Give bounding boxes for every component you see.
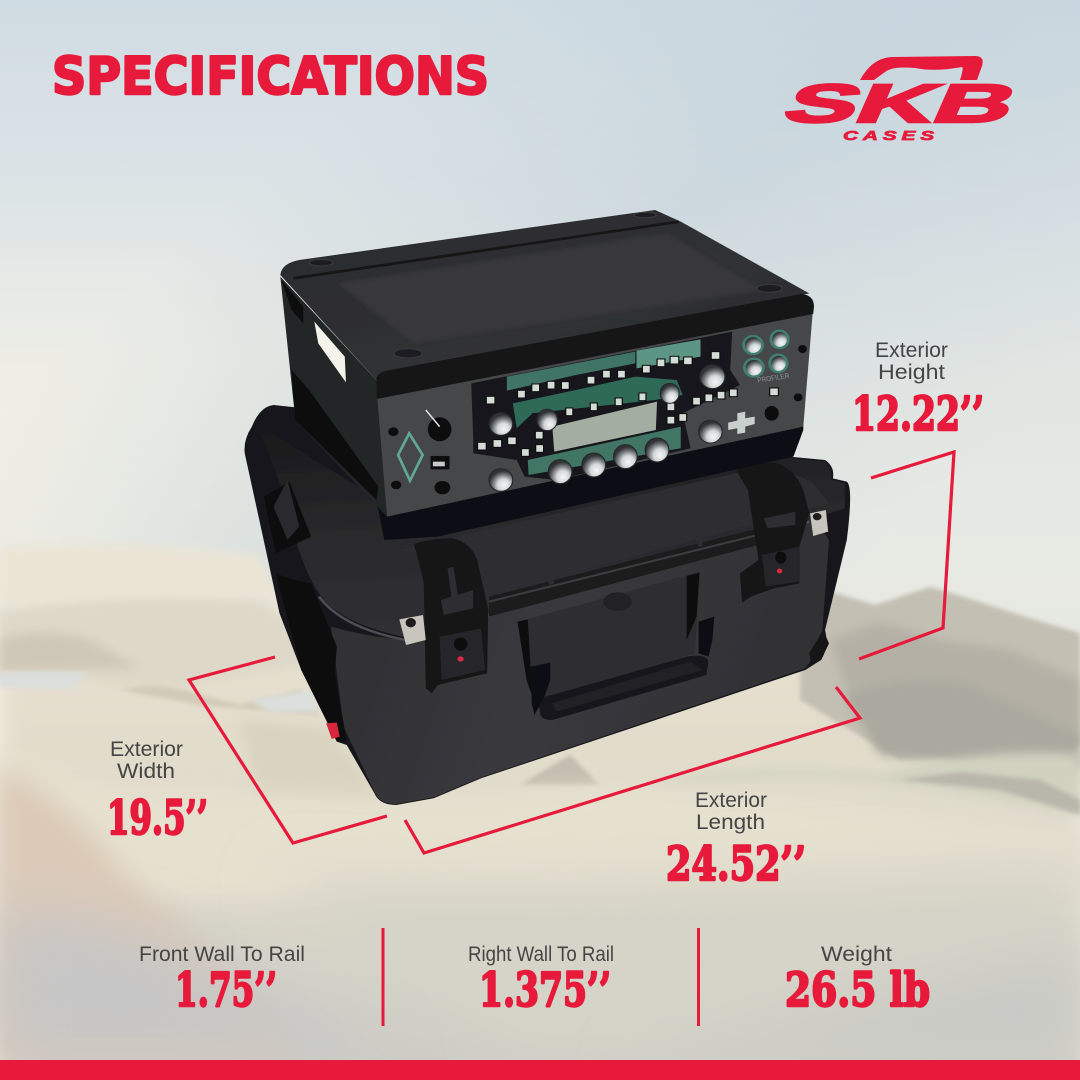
left hinge plate xyxy=(399,615,426,645)
label: exterior length: Exterior xyxy=(695,789,767,812)
label: right wall to rail: Right Wall To Rail xyxy=(468,943,614,966)
label: exterior height: Exterior xyxy=(875,339,948,362)
value: 26.5 lb: 26.5 lb xyxy=(785,963,930,1018)
title: SPECIFICATIONS xyxy=(52,47,489,107)
spec: right wall to rail xyxy=(468,943,614,1018)
label: weight: Weight xyxy=(821,943,892,966)
value: 19.5: 19.5’’ xyxy=(107,791,208,846)
amp front panel xyxy=(376,307,813,517)
green band upper right xyxy=(636,339,701,368)
USB port xyxy=(431,456,450,469)
recess flap tab xyxy=(603,592,632,611)
wheel xyxy=(809,630,829,663)
amp corner feet xyxy=(309,212,782,358)
amp front rim xyxy=(376,294,814,399)
right lock hole xyxy=(775,552,786,564)
logo subtitle: CASES xyxy=(843,128,939,143)
logo: SKB Cases xyxy=(775,56,1028,143)
spec: exterior height xyxy=(852,339,984,442)
headphone jack xyxy=(434,481,450,494)
value: 1.75: 1.75’’ xyxy=(175,963,277,1018)
right red dot xyxy=(777,569,782,573)
handle recess xyxy=(519,572,701,700)
spec: exterior width xyxy=(107,738,208,846)
rear latch block xyxy=(301,670,347,742)
rail tabs xyxy=(542,518,703,585)
PROFILER label: PROFILER xyxy=(757,372,790,384)
product: black hard case xyxy=(245,405,850,805)
divider right xyxy=(697,928,700,1026)
label: exterior width: Width xyxy=(117,760,175,783)
right latch xyxy=(736,463,809,603)
control panel black zone xyxy=(471,332,740,480)
panel buttons xyxy=(478,352,778,456)
seal line xyxy=(319,522,809,640)
green band lower xyxy=(513,377,683,428)
handle grip xyxy=(538,656,708,720)
product: Kemper Profiler amp head xyxy=(280,210,814,540)
case lid xyxy=(256,423,845,637)
lid front highlight xyxy=(398,470,829,597)
red release button xyxy=(326,723,340,739)
left red dot xyxy=(457,656,464,662)
teal top-right knobs xyxy=(744,331,788,377)
black selector knob xyxy=(428,417,451,441)
divider left xyxy=(382,928,384,1026)
input jack xyxy=(765,406,779,421)
spec: front wall to rail xyxy=(139,943,305,1018)
amp lower shadow lip xyxy=(376,400,803,540)
logo wordmark: SKB xyxy=(775,73,1028,133)
panel screws xyxy=(388,345,807,489)
logo arch xyxy=(860,56,983,80)
amp rack ears xyxy=(282,280,378,500)
value: 24.52: 24.52’’ xyxy=(666,837,806,892)
background: mountain ridge xyxy=(800,587,1080,760)
recess black strips xyxy=(518,573,699,703)
bright knobs xyxy=(489,365,725,491)
dimension bracket: length xyxy=(405,687,860,853)
selector pointer xyxy=(426,410,440,427)
amp top inset panel xyxy=(339,233,762,343)
rail bars xyxy=(489,528,758,617)
amp top back rail xyxy=(293,222,679,278)
LCD display xyxy=(552,402,657,452)
value: 1.375: 1.375’’ xyxy=(479,963,611,1018)
label: exterior width: Exterior xyxy=(110,738,183,761)
amp side window xyxy=(314,322,346,382)
case front body xyxy=(331,517,829,804)
value: 12.22: 12.22’’ xyxy=(852,387,984,442)
green band under display xyxy=(528,427,681,475)
bottom red bar xyxy=(0,1060,1080,1080)
case silhouette xyxy=(245,405,850,805)
label: front wall to rail: Front Wall To Rail xyxy=(139,943,305,966)
handle brackets xyxy=(531,617,714,715)
USB connector xyxy=(433,462,445,466)
spec: exterior length xyxy=(666,789,806,892)
label: exterior height: Height xyxy=(878,361,945,384)
left latch xyxy=(414,538,488,693)
dimension bracket: height xyxy=(859,452,954,659)
side handle xyxy=(264,482,337,680)
dimension bracket: width xyxy=(189,657,387,843)
green band upper xyxy=(507,352,635,391)
logo diamond xyxy=(398,433,423,481)
left lock hole xyxy=(454,637,467,651)
amp top xyxy=(280,210,809,380)
right hinge plate xyxy=(810,510,828,536)
label: exterior length: Length xyxy=(696,811,765,834)
spec: weight xyxy=(785,943,930,1018)
navigation pad xyxy=(728,412,755,434)
amp left side xyxy=(280,277,387,517)
